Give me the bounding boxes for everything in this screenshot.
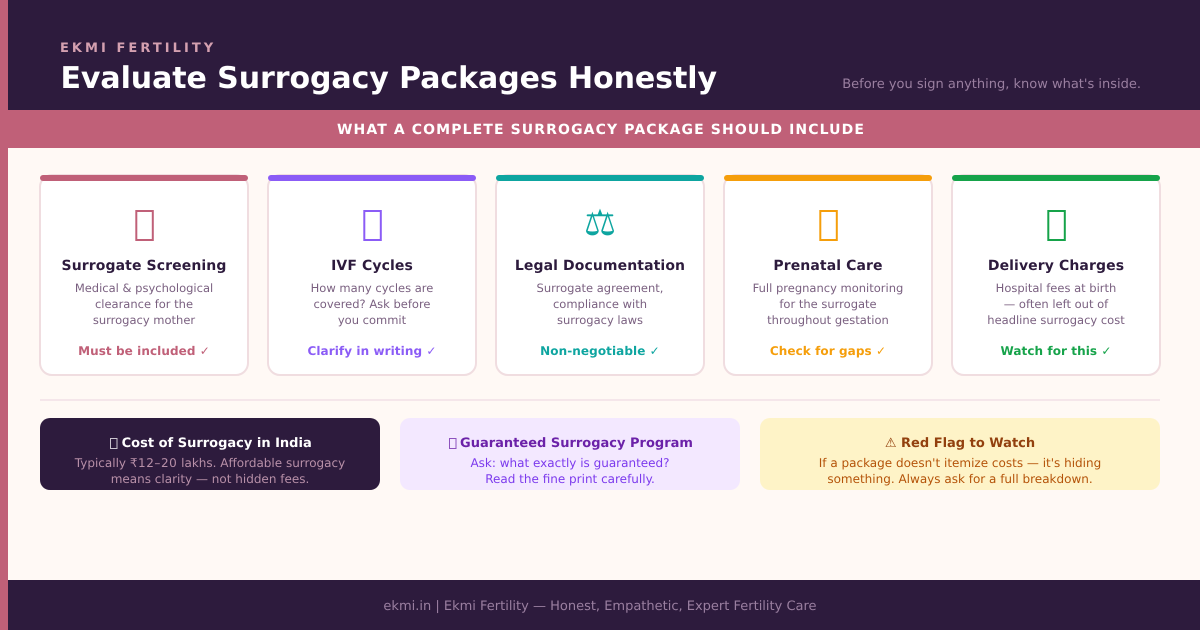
header band [8, 0, 1200, 110]
card description: Medical & psychological [75, 281, 213, 295]
callout heading: Cost of Surrogacy in India [122, 436, 312, 451]
card description: headline surrogacy cost [987, 313, 1125, 327]
callout: red flag [760, 418, 1160, 490]
card: delivery charges [952, 175, 1160, 375]
card description: surrogacy laws [557, 313, 643, 327]
card description: you commit [338, 313, 407, 327]
card tag: Watch for this ✓ [1000, 344, 1112, 358]
card description: Full pregnancy monitoring [753, 281, 903, 295]
footer: ekmi.in | Ekmi Fertility — Honest, Empathetic, Expert Fertility Care [383, 599, 817, 614]
left accent stripe [0, 0, 8, 630]
callout text: If a package doesn't itemize costs — it's hiding [819, 456, 1101, 470]
card description: for the surrogate [779, 297, 877, 311]
callout text: means clarity — not hidden fees. [111, 472, 309, 486]
card description: covered? Ask before [313, 297, 431, 311]
icon: screening placeholder [136, 211, 153, 240]
card heading: Prenatal Care [773, 258, 883, 274]
icon: ivf placeholder [364, 211, 381, 240]
callout icon placeholder [450, 438, 456, 448]
card heading: IVF Cycles [331, 258, 413, 274]
card description: throughout gestation [767, 313, 889, 327]
brand eyebrow: EKMI FERTILITY [60, 41, 216, 56]
section banner [0, 110, 1200, 148]
card: prenatal care [724, 175, 932, 375]
callout text: Read the fine print carefully. [485, 472, 655, 486]
title: Evaluate Surrogacy Packages Honestly [60, 61, 717, 96]
callout text: something. Always ask for a full breakdown. [827, 472, 1093, 486]
card description: Hospital fees at birth [996, 281, 1116, 295]
card heading: Delivery Charges [988, 258, 1124, 274]
callout text: Ask: what exactly is guaranteed? [470, 456, 670, 470]
icon: scales: ⚖ [584, 203, 616, 244]
card description: surrogacy mother [93, 313, 195, 327]
card: ivf cycles [268, 175, 476, 375]
card description: compliance with [553, 297, 647, 311]
card description: How many cycles are [311, 281, 433, 295]
card: legal documentation [496, 175, 704, 375]
section banner: WHAT A COMPLETE SURROGACY PACKAGE SHOULD INCLUDE [337, 122, 865, 138]
card accent bar [268, 175, 476, 181]
card accent bar [952, 175, 1160, 181]
card accent bar [496, 175, 704, 181]
card tag: Clarify in writing ✓ [307, 344, 437, 358]
icon: delivery placeholder [1048, 211, 1065, 240]
card description: — often left out of [1004, 297, 1109, 311]
card heading: Surrogate Screening [62, 258, 226, 274]
icon: prenatal placeholder [820, 211, 837, 240]
card tag: Non-negotiable ✓ [540, 344, 660, 358]
callout icon placeholder [110, 438, 117, 448]
callout: cost of surrogacy [40, 418, 380, 490]
footer [8, 580, 1200, 630]
card description: clearance for the [95, 297, 193, 311]
card tag: Check for gaps ✓ [770, 344, 886, 358]
callout: guaranteed program [400, 418, 740, 490]
tagline: Before you sign anything, know what's inside. [842, 77, 1141, 92]
card: surrogate screening [40, 175, 248, 375]
callout heading: ⚠ Red Flag to Watch [885, 436, 1035, 451]
callout heading: Guaranteed Surrogacy Program [460, 436, 693, 451]
callout text: Typically ₹12–20 lakhs. Affordable surrogacy [75, 456, 345, 470]
card heading: Legal Documentation [515, 258, 685, 274]
card accent bar [724, 175, 932, 181]
card tag: Must be included ✓ [78, 344, 210, 358]
card accent bar [40, 175, 248, 181]
card description: Surrogate agreement, [537, 281, 663, 295]
